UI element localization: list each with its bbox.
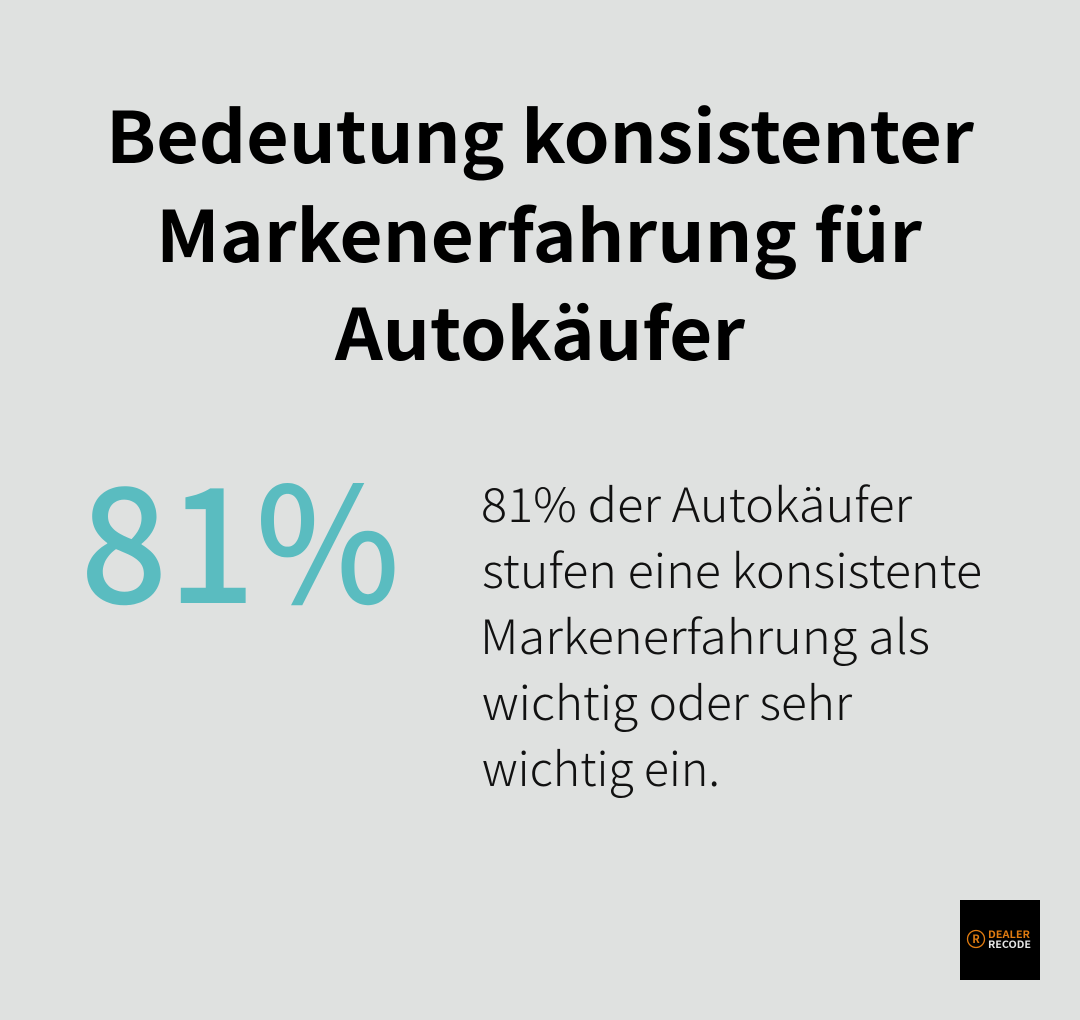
description text: wichtig oder sehr <box>482 665 852 734</box>
description text: 81% der Autokäufer <box>481 467 912 536</box>
big statistic: 81%: 81% <box>80 418 400 650</box>
logo: Dealer Recode <box>960 900 1040 980</box>
description text <box>480 467 982 800</box>
title <box>106 82 975 381</box>
logo wordmark: RECODE <box>988 936 1031 951</box>
description text: wichtig ein. <box>482 731 720 800</box>
logo wordmark <box>988 926 1031 951</box>
icon: R in circle: R <box>972 931 980 947</box>
description text: Markenerfahrung als <box>480 599 930 668</box>
description text: stufen eine konsistente <box>482 533 982 602</box>
title: Autokäufer <box>334 279 746 381</box>
logo wordmark: DEALER <box>988 926 1030 941</box>
title: Bedeutung konsistenter <box>106 82 975 184</box>
title: Markenerfahrung für <box>156 181 923 283</box>
